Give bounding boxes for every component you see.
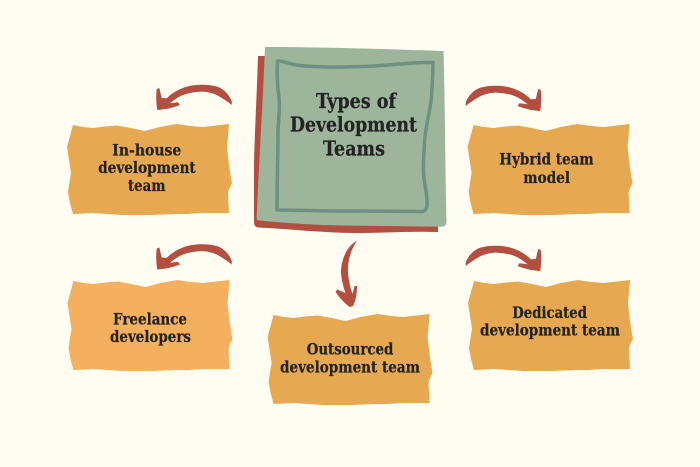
- arrow: to outsourced: [336, 241, 357, 307]
- panel: central title card: [254, 47, 446, 233]
- arrow: to freelance: [156, 244, 232, 270]
- green card: [257, 47, 446, 227]
- title: [290, 89, 417, 161]
- title: Development: [290, 113, 417, 137]
- panel: dedicated development team: [468, 280, 633, 371]
- red backing sheet: [254, 56, 440, 233]
- panel: outsourced development team: [268, 314, 433, 405]
- panel: dedicated development team: Dedicated: [512, 303, 587, 322]
- arrow: to in-house: [156, 85, 232, 110]
- panel: outsourced development team: Outsourced: [307, 340, 394, 359]
- panel: hybrid team model: [468, 124, 633, 215]
- panel: in-house development team: In-house: [112, 141, 181, 160]
- panel: freelance developers: developers: [110, 327, 191, 346]
- panel: in-house development team: development: [98, 158, 196, 177]
- panel: freelance developers: Freelance: [113, 310, 187, 329]
- inner hand-drawn frame: [277, 61, 433, 212]
- panel: hybrid team model: model: [523, 168, 570, 187]
- panel: freelance developers: [68, 280, 232, 371]
- arrow: to dedicated: [466, 246, 541, 271]
- panel: hybrid team model: Hybrid team: [499, 150, 594, 169]
- title: Teams: [323, 137, 385, 161]
- panel: in-house development team: [67, 124, 232, 215]
- panel: dedicated development team: development team: [480, 321, 621, 340]
- title: Types of: [316, 89, 397, 113]
- panel: outsourced development team: development team: [280, 358, 421, 377]
- arrow: to hybrid: [466, 86, 541, 111]
- panel: in-house development team: team: [128, 176, 166, 195]
